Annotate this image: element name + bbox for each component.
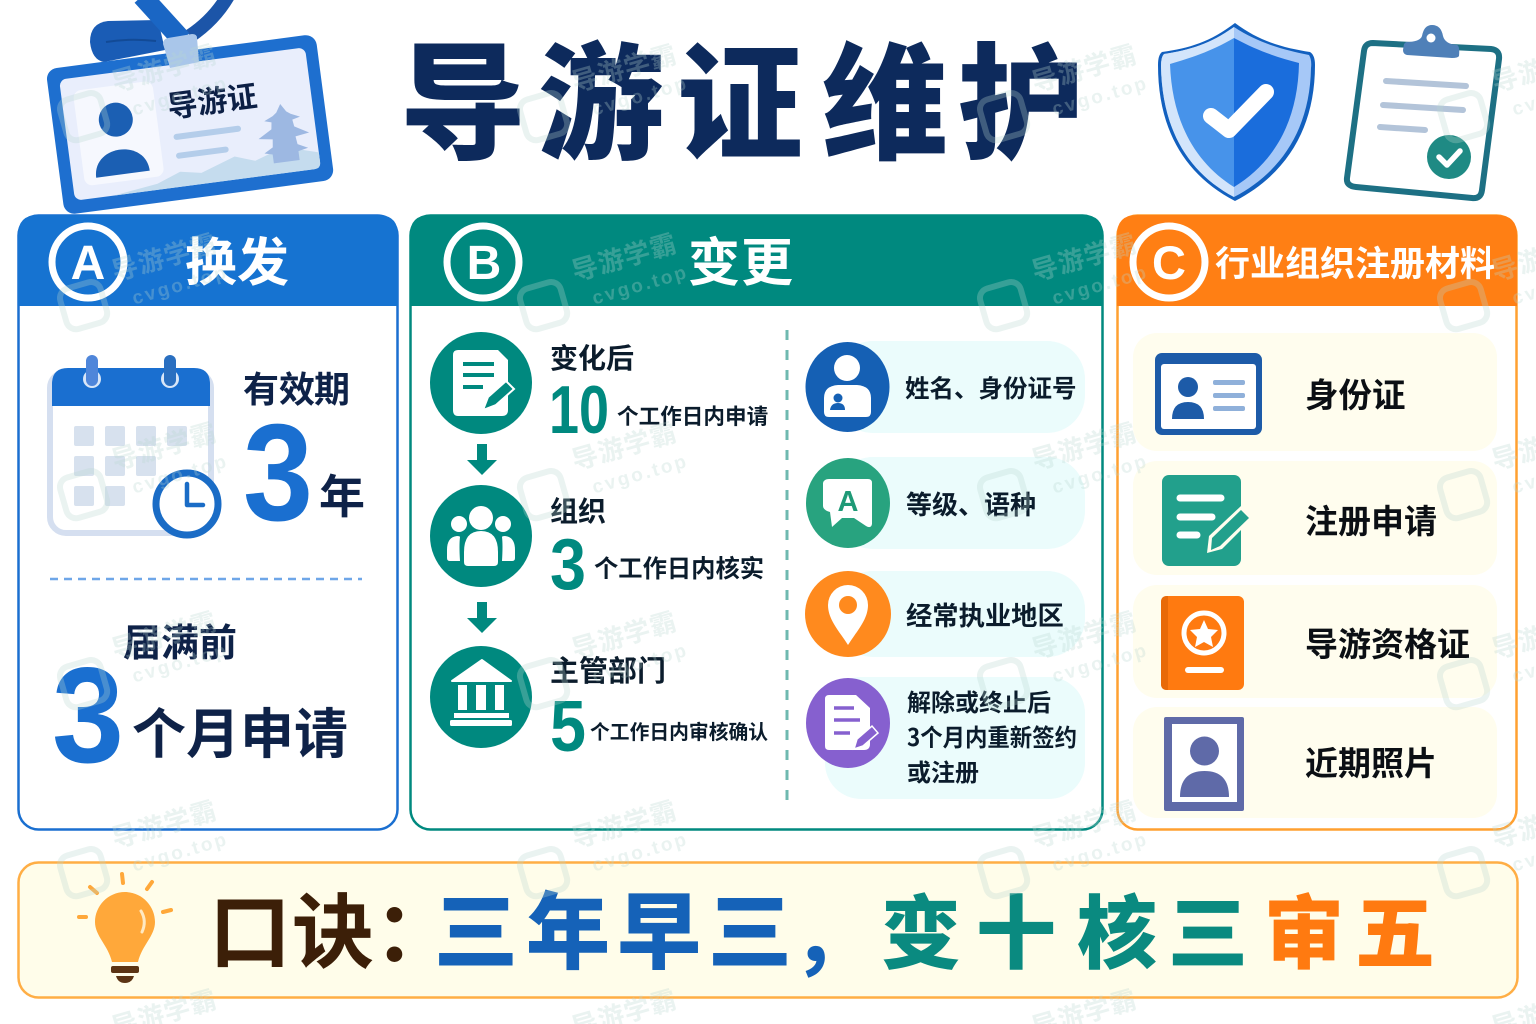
watermarks: 导游学霸	[1027, 601, 1141, 667]
item: recent photo	[1133, 707, 1497, 818]
watermarks: cvgo.top	[590, 640, 691, 687]
item: re-signing: 解除或终止后	[907, 683, 1051, 718]
application deadline text: 3	[52, 639, 124, 791]
title: 导游证维护	[400, 4, 1084, 186]
panel C header	[1117, 215, 1517, 306]
mnemonic part 3: 审五	[1264, 870, 1435, 986]
watermarks: 导游学霸	[1027, 223, 1141, 289]
watermarks: cvgo.top	[1050, 451, 1151, 498]
step: authority: 5	[550, 687, 586, 767]
watermarks: 导游学霸	[567, 412, 681, 478]
item: level and language	[806, 457, 1085, 549]
step: authority	[430, 646, 768, 767]
watermarks: 导游学霸	[107, 34, 221, 100]
watermarks: 导游学霸	[567, 223, 681, 289]
watermarks: cvgo.top	[590, 73, 691, 120]
item: name and ID	[806, 341, 1085, 433]
panel: A renew	[18, 215, 398, 830]
panel C header: C	[1152, 236, 1186, 289]
watermarks: 导游学霸	[1027, 412, 1141, 478]
panel A header	[18, 215, 398, 306]
application deadline text: 届满前	[123, 612, 237, 667]
mnemonic part 1: ，	[792, 870, 876, 991]
step: after change	[430, 332, 768, 448]
panel A header: 换发	[185, 221, 289, 296]
watermarks: 导游学霸	[567, 34, 681, 100]
icon: light bulb	[79, 874, 171, 983]
mnemonic part 2: 变十核三	[881, 870, 1248, 986]
watermarks: cvgo.top	[1050, 640, 1151, 687]
step: after change: 10	[549, 372, 609, 448]
panel B header: 变更	[688, 221, 793, 296]
watermarks: cvgo.top	[130, 451, 231, 498]
item: guide qualification certificate: 导游资格证	[1305, 618, 1470, 666]
watermarks: 导游学霸	[567, 601, 681, 667]
application deadline text: 个月申请	[132, 690, 348, 769]
panel B header: B	[467, 237, 501, 290]
step: authority: 个工作日内审核确认	[590, 716, 768, 745]
watermarks: cvgo.top	[130, 73, 231, 120]
watermarks: cvgo.top	[1050, 829, 1151, 876]
watermarks: cvgo.top	[590, 262, 691, 309]
step: organisation	[430, 485, 764, 605]
panel B header	[410, 215, 1103, 306]
step: organisation: 3	[550, 525, 586, 605]
item: region	[805, 571, 1085, 657]
watermarks: 导游学霸	[567, 790, 681, 856]
watermarks: cvgo.top	[590, 451, 691, 498]
watermarks: cvgo.top	[130, 829, 231, 876]
mnemonic label: 口诀：	[209, 866, 456, 985]
item: registration application	[1133, 461, 1497, 575]
validity text: 有效期	[243, 361, 350, 413]
watermarks: 导游学霸	[107, 601, 221, 667]
arrow	[467, 602, 497, 633]
watermarks: cvgo.top	[590, 829, 691, 876]
step: after change: 变化后	[550, 337, 634, 377]
item: re-signing: 3个月内重新签约	[907, 718, 1077, 753]
item: name and ID: 姓名、身份证号	[905, 370, 1076, 405]
panel A header: A	[71, 237, 105, 290]
item: registration application: 注册申请	[1305, 495, 1437, 543]
validity text: 年	[319, 461, 365, 527]
item: re-signing: 或注册	[907, 753, 979, 788]
validity text: 3	[243, 396, 313, 550]
item: guide qualification certificate	[1133, 585, 1497, 698]
step: after change: 个工作日内申请	[617, 400, 768, 431]
application deadline text	[52, 612, 348, 791]
watermarks: 导游学霸	[1027, 790, 1141, 856]
watermarks: cvgo.top	[130, 262, 231, 309]
icon: calendar and clock	[50, 355, 218, 535]
panel: mnemonic banner	[18, 862, 1518, 998]
item: recent photo: 近期照片	[1305, 737, 1437, 785]
arrow	[467, 444, 497, 475]
watermarks: 导游学霸	[107, 412, 221, 478]
icon: clipboard with check	[1347, 25, 1499, 198]
item: re-signing	[806, 677, 1085, 799]
watermarks: 导游学霸	[1027, 34, 1141, 100]
step: organisation: 组织	[550, 490, 606, 530]
mnemonic part 1: 三年早三	[434, 866, 792, 987]
item: ID card	[1133, 333, 1497, 451]
item: region: 经常执业地区	[906, 594, 1064, 633]
panel: B changes	[410, 215, 1103, 830]
icon: tour guide ID card	[46, 0, 334, 215]
card label: 导游证	[164, 71, 259, 127]
watermarks: 导游学霸	[107, 790, 221, 856]
step: organisation: 个工作日内核实	[594, 549, 764, 584]
icon: shield	[1158, 23, 1315, 201]
watermarks: cvgo.top	[1050, 73, 1151, 120]
panel: C association registration materials	[1117, 215, 1517, 830]
step: authority: 主管部门	[550, 648, 666, 690]
watermarks: 导游学霸	[107, 223, 221, 289]
validity text	[243, 361, 365, 550]
watermarks: cvgo.top	[1050, 262, 1151, 309]
item: ID card: 身份证	[1305, 368, 1406, 417]
watermarks: cvgo.top	[130, 640, 231, 687]
item: level and language: A	[838, 486, 859, 518]
item: level and language: 等级、语种	[906, 485, 1036, 522]
panel C header: 行业组织注册材料	[1215, 236, 1495, 287]
